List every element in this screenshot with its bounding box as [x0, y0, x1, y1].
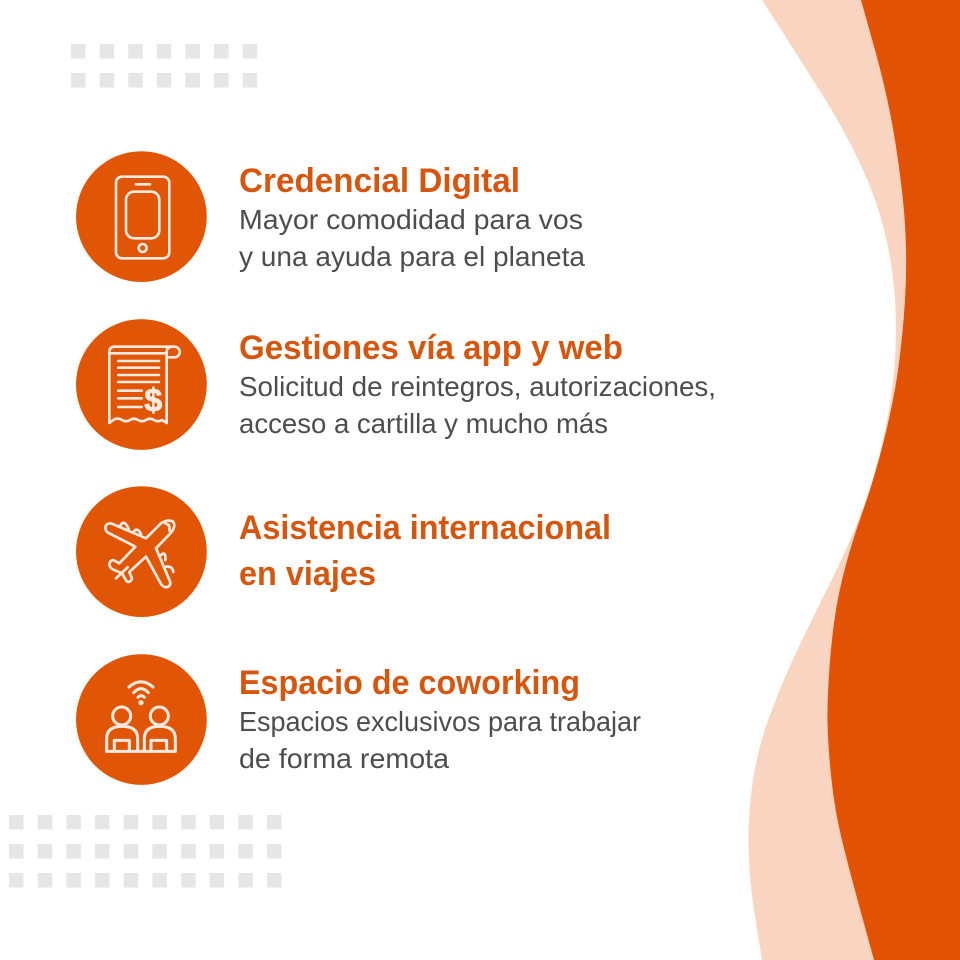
heading: asistencia internacional	[239, 509, 611, 593]
dot pattern: bottom	[9, 815, 282, 888]
text: credencial description: Mayor comodidad para vos	[239, 204, 583, 235]
panel: asistencia	[76, 486, 611, 617]
heading: gestiones: Gestiones vía app y web	[239, 329, 623, 367]
text: gestiones description	[239, 371, 716, 439]
heading: credencial digital: Credencial Digital	[239, 162, 520, 200]
text: gestiones description: acceso a cartilla y mucho más	[239, 408, 608, 439]
icon: coworking people in circle	[76, 654, 207, 785]
heading: asistencia internacional: en viajes	[239, 555, 376, 593]
icon: phone in circle	[76, 151, 207, 282]
panel: gestiones	[76, 319, 716, 450]
text: coworking description	[239, 706, 641, 774]
panel: coworking	[76, 654, 641, 785]
text: gestiones description: Solicitud de reintegros, autorizaciones,	[239, 371, 716, 402]
text: credencial description: y una ayuda para el planeta	[239, 241, 585, 272]
icon glyph: dollar sign: $	[144, 382, 162, 418]
panel: credencial digital	[76, 151, 585, 282]
heading: asistencia internacional: Asistencia internacional	[239, 509, 611, 547]
text: coworking description: de forma remota	[239, 743, 449, 774]
text: credencial description	[239, 204, 585, 272]
heading: espacio de coworking: Espacio de coworking	[239, 664, 580, 702]
icon: receipt in circle	[76, 319, 207, 450]
icon: airplane in circle	[76, 486, 207, 617]
background wave: dark orange	[827, 0, 960, 960]
background wave: light peach	[748, 0, 960, 960]
text: coworking description: Espacios exclusivos para trabajar	[239, 706, 641, 737]
dot pattern: top	[71, 44, 257, 88]
